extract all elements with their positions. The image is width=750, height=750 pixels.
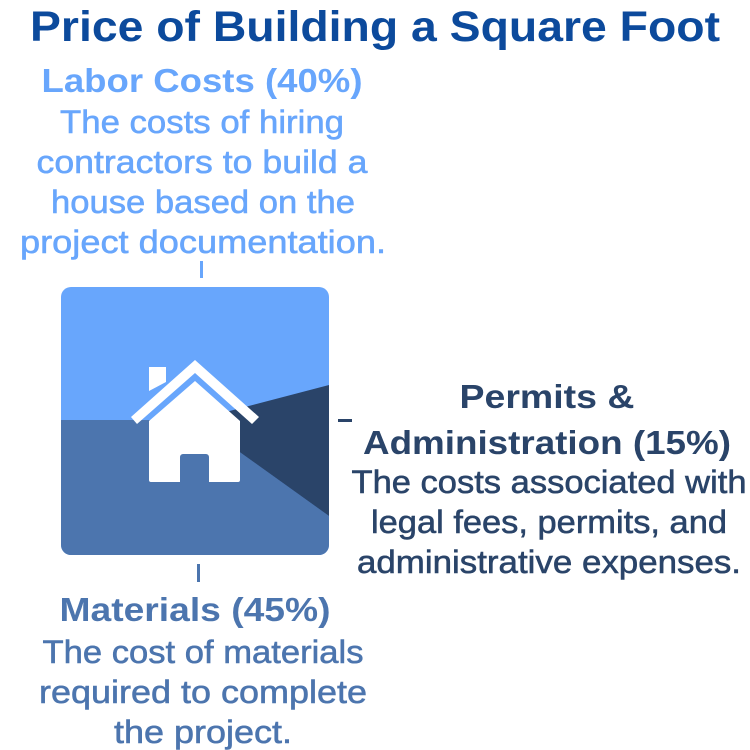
house roof [131,360,259,424]
description: materials: required to complete [39,674,367,710]
house body [149,381,240,482]
text block: materials [39,591,367,750]
heading: permits and administration: Administration (15%) [363,424,731,461]
description: materials: the project. [114,714,292,750]
description: materials: The cost of materials [42,634,364,670]
chart background: labor slice [61,287,329,555]
description: labor costs: The costs of hiring [60,104,344,140]
text block: labor costs [20,62,386,260]
heading: labor costs: Labor Costs (40%) [42,62,362,99]
heading: materials: Materials (45%) [60,591,330,628]
heading: permits and administration: Permits & [460,378,634,415]
description: labor costs [20,104,386,260]
description: permits and administration: legal fees, permits, and [371,504,727,540]
description: permits and administration [352,464,746,580]
chart slice: materials [61,420,329,555]
icon: house [131,360,259,482]
description: labor costs: contractors to build a [36,144,368,180]
connector: permits [338,419,352,422]
description: labor costs: project documentation. [20,224,386,260]
description: permits and administration: administrative expenses. [357,544,741,580]
connector: labor costs [200,261,203,278]
house chimney [149,367,166,391]
description: materials [39,634,367,750]
pie chart icon tile [61,287,329,555]
title: Price of Building a Square Foot [30,3,720,51]
text block: permits and administration [352,378,746,580]
connector: materials [197,564,200,582]
chart slice: permits [195,385,329,516]
description: permits and administration: The costs associated with [352,464,746,500]
heading: permits and administration [363,378,731,461]
description: labor costs: house based on the [51,184,355,220]
